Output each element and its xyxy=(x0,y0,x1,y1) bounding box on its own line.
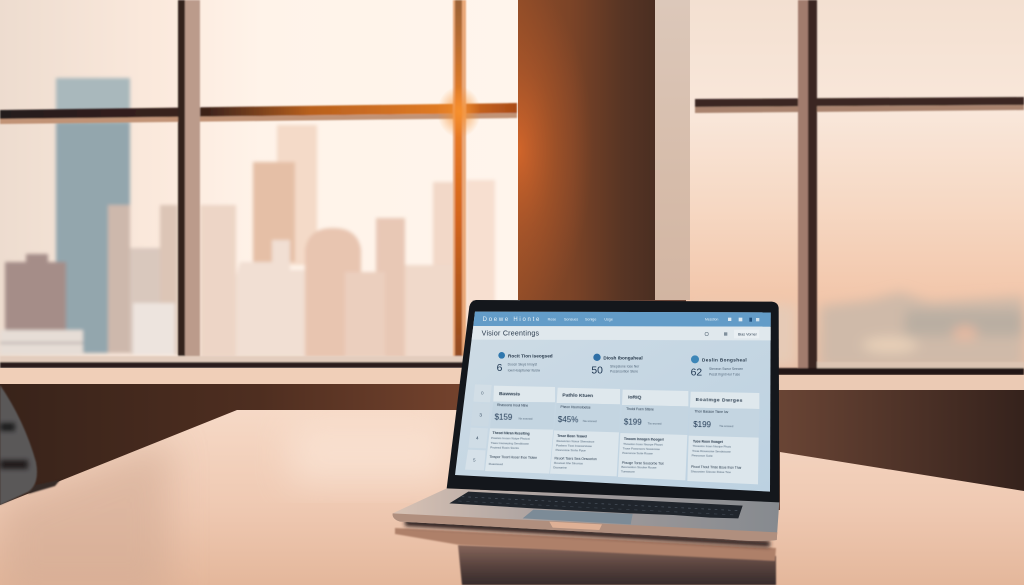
pricing card 4: $199 xyxy=(693,420,712,429)
stat 1: Iowl Hosptiuner Ituisw xyxy=(508,368,541,372)
pricing card 2: Reuort Tsers Sws Oesoorion xyxy=(554,456,597,461)
dashboard top bar: Sonsues xyxy=(564,318,578,322)
light pillar strip xyxy=(655,0,690,300)
stat 2 xyxy=(591,354,643,376)
screen bezel xyxy=(447,300,779,502)
stat 2: Shepsione Iose Ner xyxy=(610,364,640,368)
stat 3: Steneon Sseor Seecen xyxy=(709,367,743,371)
pricing card 1 xyxy=(485,386,555,474)
right window frame xyxy=(690,0,1024,375)
laptop xyxy=(393,300,779,541)
base front edge xyxy=(393,513,777,541)
row number column: 0 xyxy=(481,391,484,396)
pricing card 3: Thosolon Irosn Nsorpe Phosrt xyxy=(623,442,663,447)
dashboard top bar: Usge xyxy=(604,318,613,322)
row number column xyxy=(465,384,492,470)
column xyxy=(518,0,655,300)
pricing card 2: Pheon Hsornotoelse xyxy=(560,405,591,410)
pricing card 4: Tross Rosenoise Sendsiouse xyxy=(692,449,731,453)
pricing card 3: Phsoge Torse Sousorbe Tiot xyxy=(622,461,664,466)
sky: right window xyxy=(686,0,1024,375)
pricing card 1: $159 xyxy=(494,413,513,422)
laptop reflection on table xyxy=(395,519,776,585)
stat 3: 62 xyxy=(691,368,702,379)
pricing card 4: Thosolon Iroan Nsotpe Phois xyxy=(692,444,732,449)
pricing card 3: $199 xyxy=(624,417,642,427)
stat 1: Rocit Tion Iseogsed xyxy=(508,354,553,359)
pricing card 3: Tuesssore xyxy=(621,469,635,474)
stat 2: Possnsortion Stere xyxy=(610,370,638,374)
stat 1: Doocn Sleys Imoyst xyxy=(508,363,537,367)
screen panel xyxy=(455,312,771,492)
dashboard top bar: Messtion xyxy=(705,318,718,322)
pricing card 1: Bawwsis xyxy=(499,391,520,397)
pricing card 2: $45% xyxy=(558,415,578,424)
dashboard top bar: Sonige xyxy=(585,318,596,322)
pricing card 1: Tioes Insoseping Sendtiouse xyxy=(491,441,529,446)
page title bar xyxy=(472,326,771,340)
pricing card 3 xyxy=(618,390,688,480)
pricing card 1: Rhasoons Inoul Ntne xyxy=(497,403,528,408)
pricing card 4: Phoot Thout Tinse Bsue Ihsn Thar xyxy=(691,465,742,470)
office chair xyxy=(0,385,60,505)
wall below window: left xyxy=(0,384,470,514)
pricing card 2: Rouoset Ithe Slnortoo xyxy=(554,461,583,465)
wall below window: right xyxy=(775,390,1024,500)
row number column: 4 xyxy=(476,435,479,440)
row number column: 5 xyxy=(473,458,476,463)
pricing card 4: Shooosten Stiouse Rotse Tioe xyxy=(691,469,731,474)
front notch xyxy=(549,522,602,530)
pricing card 1: Theoei Nkran Reselting xyxy=(493,431,530,436)
window sill: left xyxy=(0,368,470,384)
pricing card 2: Na sroned xyxy=(583,419,597,423)
city haze: right xyxy=(694,292,1024,368)
page title bar: Visior Creentings xyxy=(482,330,539,337)
pricing card 3: Tinoom Innogen Ihoogerl xyxy=(624,437,664,442)
stat 2: 50 xyxy=(591,365,603,376)
dashboard top bar: Rose xyxy=(548,318,556,322)
dashboard top bar: Doewe Hionte xyxy=(483,317,540,323)
pricing card 3: Boonsotion Stoulse Rouse xyxy=(621,465,657,470)
sky: left window xyxy=(0,0,520,370)
stat 3: Pesst Ihgnt Hur Tuse xyxy=(709,373,740,377)
pricing card 1: Nx svsned xyxy=(518,416,533,421)
pricing card 2: Pathlo Ktuen xyxy=(562,393,593,399)
pricing card 3: Thoiol Fuen Stisne xyxy=(626,407,654,412)
pricing card 4: Pesnonoe Suite xyxy=(692,453,713,458)
row number column: 3 xyxy=(479,413,482,418)
pricing card 3: IoRIQ xyxy=(628,395,642,401)
stat 1 xyxy=(497,352,553,374)
table xyxy=(0,410,1024,585)
pricing card 4: Thon Bassoe Tisne Iuv xyxy=(694,409,729,414)
pricing card 1: Pnoiesd Rusin Stonts xyxy=(490,445,519,450)
pricing card 4: Tia sroned xyxy=(719,424,734,428)
stat 3 xyxy=(691,355,747,379)
pricing card 4: Tuoe Roon Ihoaget xyxy=(693,439,724,444)
page title bar: Bias Vorner xyxy=(738,333,758,337)
window sill: right xyxy=(775,375,1024,390)
pricing card 2: Reowsrion Nosur Shensinoe xyxy=(556,439,595,443)
pricing card 1: Tinspor Tioort Hooer Ihoe Tiotee xyxy=(489,455,537,460)
left window frame xyxy=(0,0,517,368)
stat 1: 6 xyxy=(497,363,503,374)
city skyline: left xyxy=(0,78,495,360)
pricing card 2: Poshem Tiost Insesorstuse xyxy=(556,443,592,448)
pricing card 2: Tesor Bosn Teawel xyxy=(557,434,587,439)
dashboard top bar xyxy=(473,312,771,327)
pricing card 4 xyxy=(687,392,759,484)
orange glow at frame crossing xyxy=(437,86,481,138)
pricing card 2: Pesnonioe Sinhs Ppue xyxy=(556,448,586,453)
stat 2: Diosh Ibongaheal xyxy=(603,355,643,360)
pricing card 4: Eoatmge Dwrges xyxy=(696,397,743,404)
keyboard xyxy=(449,492,743,518)
pricing card 3: Trose Possnsors Nosoionse xyxy=(623,446,660,451)
pricing card 1: Ruaotssed xyxy=(489,462,503,466)
pricing card 2 xyxy=(550,388,620,476)
stat 3: Deslin Bongsheal xyxy=(702,358,747,363)
laptop base xyxy=(393,488,779,541)
trackpad xyxy=(523,510,633,524)
pricing card 3: Tia sroned xyxy=(648,421,662,425)
pricing card 3: Pesnonoe Suite Rouse xyxy=(622,451,653,456)
pricing card 1: Powisio Imoon Notpe Phoicsi xyxy=(491,436,530,441)
pricing card 2: Doosarine xyxy=(553,465,567,470)
